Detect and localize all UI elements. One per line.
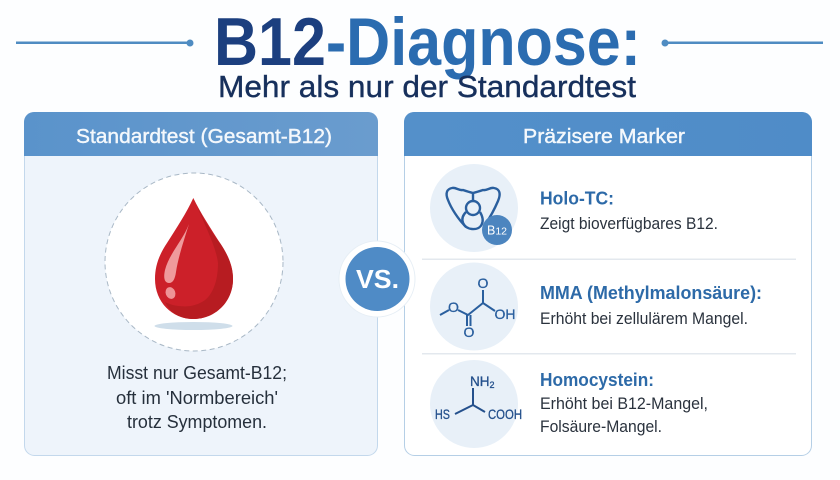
text block: Gesamt-B12 description: Misst nur Gesamt-B12; [107, 363, 287, 383]
icon: Homocystein: COOH [488, 407, 522, 422]
text: Homocystein: Homocystein: [540, 370, 654, 390]
text block: Gesamt-B12 description: trotz Symptomen. [127, 412, 267, 432]
icon: MMA [430, 262, 518, 350]
text: MMA: Erhöht bei zellulärem Mangel. [540, 310, 748, 328]
marker: MMA [430, 262, 762, 350]
icon: Homocystein: HS [435, 407, 450, 422]
marker: Homocystein [430, 360, 708, 448]
icon: Holo-TC [430, 164, 518, 252]
text: MMA [540, 283, 762, 328]
icon: MMA: OH [494, 306, 516, 322]
icon: blood drop [154, 198, 233, 330]
text block: Gesamt-B12 description: oft im 'Normbereich' [116, 388, 278, 408]
icon: Homocystein: 2 [490, 380, 495, 390]
panel: Präzisere Marker [404, 112, 812, 456]
text: MMA: MMA (Methylmalonsäure): [540, 283, 762, 303]
text block: Gesamt-B12 description [107, 363, 287, 432]
subtitle: Mehr als nur der Standardtest [218, 69, 636, 104]
text: Holo-TC [540, 188, 718, 233]
left title rule [16, 40, 194, 46]
panel header: Standardtest [24, 112, 378, 156]
text: Homocystein [540, 370, 708, 436]
icon: Holo-TC: B12 [487, 224, 507, 238]
text: Holo-TC: Zeigt bioverfügbares B12. [540, 215, 718, 233]
text: Holo-TC: Holo-TC: [540, 188, 614, 208]
panel header: Präzisere Marker [404, 112, 812, 156]
VS badge [339, 241, 415, 317]
dashed circle [105, 173, 283, 351]
title: B12-Diagnose: [214, 4, 641, 80]
icon: MMA: O [448, 299, 459, 315]
icon: MMA: O [478, 275, 489, 291]
icon: MMA: O [464, 324, 475, 340]
icon: Homocystein: NH [470, 374, 490, 389]
right title rule [662, 40, 823, 46]
text: Homocystein: Folsäure-Mangel. [540, 418, 662, 436]
marker: Holo-TC [430, 164, 718, 252]
panel header: Standardtest: Standardtest (Gesamt-B12) [76, 126, 332, 148]
panel header: Präzisere Marker: Präzisere Marker [523, 126, 685, 148]
panel: Standardtest [24, 112, 378, 456]
icon: Homocystein [430, 360, 522, 448]
text: Homocystein: Erhöht bei B12-Mangel, [540, 395, 708, 413]
VS badge: VS. [356, 264, 399, 294]
